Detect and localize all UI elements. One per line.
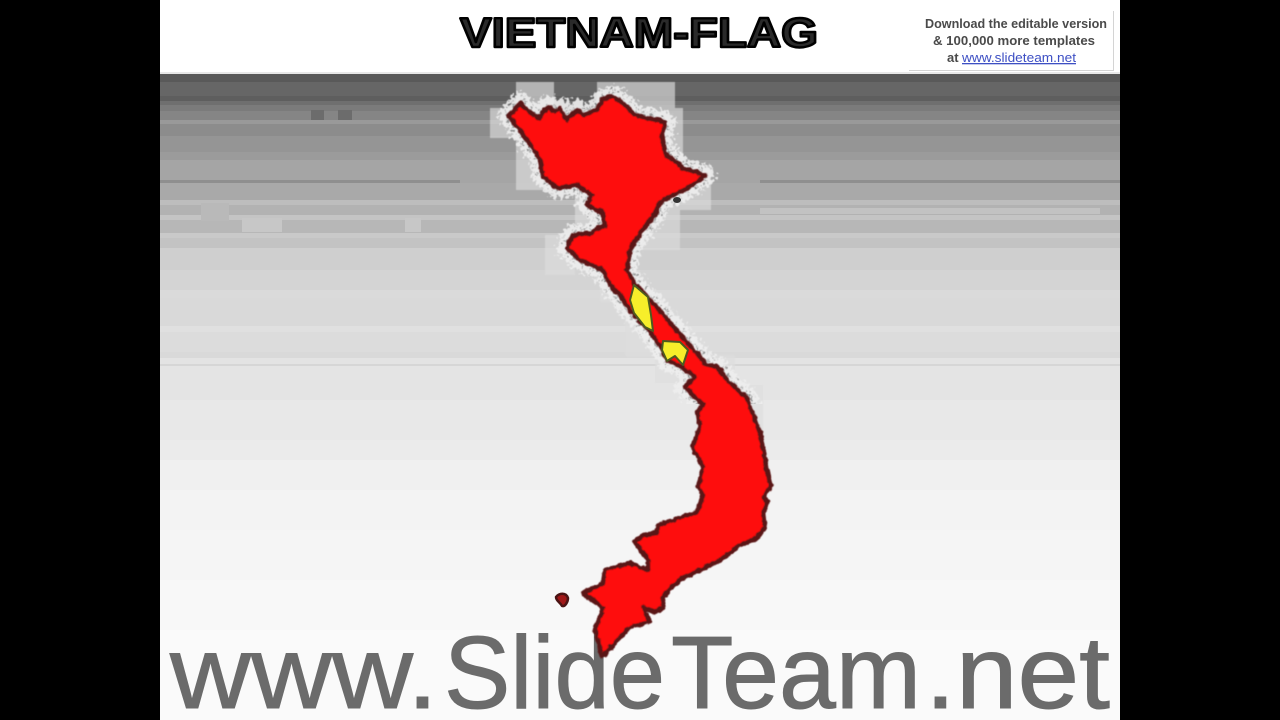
- compression halo around map: [490, 82, 759, 404]
- country outline and red fill: [509, 96, 771, 657]
- footer watermark: [169, 615, 1110, 720]
- yellow star segment: north: [630, 285, 653, 331]
- slide background: [160, 0, 1120, 720]
- download callout box: www.slideteam.net: [961, 50, 1076, 65]
- download callout box: Download the editable version: [925, 16, 1107, 31]
- download callout box: [909, 11, 1114, 70]
- small offshore island: [673, 197, 681, 203]
- yellow star segment: south: [662, 341, 688, 365]
- download callout box: & 100,000 more templates: [933, 33, 1095, 48]
- island: [556, 594, 568, 606]
- title: VIETNAM-FLAG: [460, 9, 818, 56]
- header band: [160, 0, 1120, 72]
- download callout box: at: [947, 50, 959, 65]
- map: Vietnam in flag colours: [490, 82, 771, 657]
